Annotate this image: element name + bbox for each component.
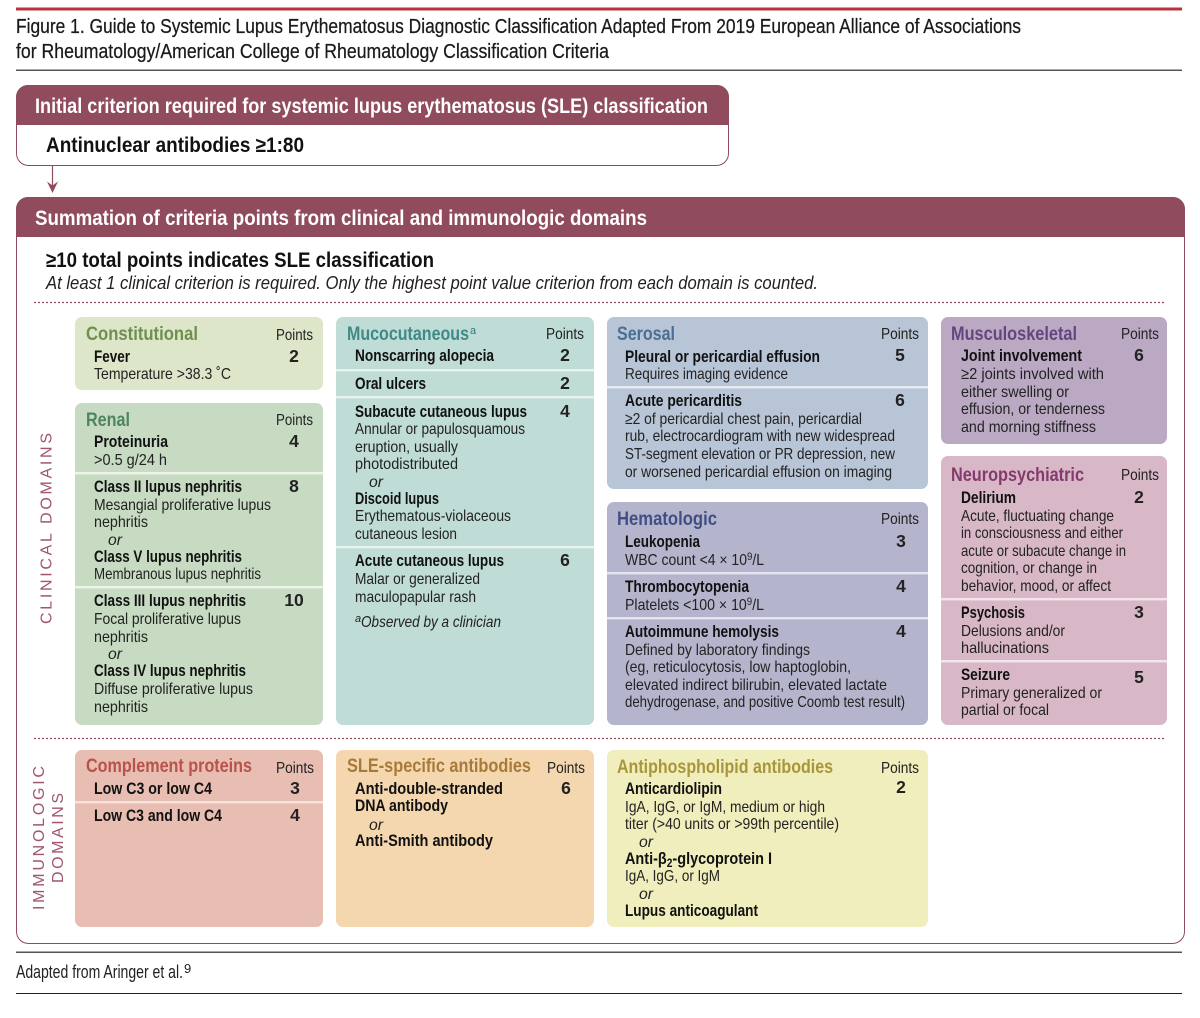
joint involvement criterion: Joint involvement [961, 346, 1082, 365]
class III or IV criterion: Diffuse proliferative lupus [94, 681, 253, 698]
requirement note: At least 1 clinical criterion is required. Only the highest point value criterion from each domain is counted. [45, 273, 818, 293]
class II or V criterion: Class V lupus nephritis [94, 547, 242, 566]
anticardiolipin, anti-beta-2-glycoprotein or lupus anticoagulant criterion: Anticardiolipin [625, 779, 722, 798]
nonscarring alopecia criterion: Nonscarring alopecia [355, 346, 494, 365]
anticardiolipin, anti-beta-2-glycoprotein or lupus anticoagulant criterion: Anti-β [625, 849, 674, 868]
class II or V criterion: or [108, 532, 123, 549]
panel: constitutional [75, 317, 323, 390]
anticardiolipin, anti-beta-2-glycoprotein or lupus anticoagulant criterion: Lupus anticoagulant [625, 901, 758, 920]
low C3 or low C4 criterion [94, 778, 300, 798]
proteinuria criterion: 4 [289, 431, 299, 451]
panel: SLE-specific antibodies: Points [547, 760, 585, 777]
low C3 or low C4 criterion: Low C3 or low C4 [94, 779, 212, 798]
heading: hematologic: Hematologic [617, 508, 717, 530]
leukopenia criterion: Leukopenia [625, 532, 700, 551]
anti-dsDNA or anti-Smith criterion: Anti-double-stranded [355, 779, 503, 798]
heading: complement proteins: Complement proteins [86, 755, 252, 777]
oral ulcers criterion [355, 373, 570, 393]
psychosis criterion: hallucinations [961, 640, 1049, 657]
initial criterion text: Antinuclear antibodies ≥1:80 [46, 134, 304, 157]
fever criterion: 2 [289, 346, 299, 366]
heading: renal: Renal [86, 409, 130, 431]
heading: antiphospholipid antibodies: Antiphospholipid antibodies [617, 756, 833, 778]
thrombocytopenia criterion: Thrombocytopenia [625, 577, 749, 596]
low C3 and low C4 criterion: Low C3 and low C4 [94, 806, 222, 825]
thrombocytopenia criterion [625, 576, 906, 614]
psychosis criterion: 3 [1134, 602, 1144, 622]
joint involvement criterion: either swelling or [961, 384, 1070, 401]
heading: mucocutaneous: Mucocutaneous [347, 323, 469, 345]
thrombocytopenia criterion: 9 [747, 596, 752, 608]
acute pericarditis criterion: ST-segment elevation or PR depression, new [625, 446, 895, 463]
proteinuria criterion [94, 431, 299, 469]
autoimmune hemolysis criterion [625, 621, 906, 711]
thrombocytopenia criterion: Platelets <100 × 10 [625, 597, 763, 614]
panel: mucocutaneous: Points [546, 326, 584, 343]
delirium criterion: acute or subacute change in [961, 543, 1126, 560]
panel: renal [75, 403, 323, 725]
low C3 or low C4 criterion: 3 [290, 778, 300, 798]
subacute cutaneous or discoid lupus criterion: eruption, usually [355, 439, 458, 456]
panel: serosal [607, 317, 928, 489]
panel: hematologic: Points [881, 511, 919, 528]
joint involvement criterion: and morning stiffness [961, 419, 1096, 436]
panel: neuropsychiatric [941, 456, 1167, 725]
anticardiolipin, anti-beta-2-glycoprotein or lupus anticoagulant criterion: IgA, IgG, or IgM, medium or high [625, 799, 825, 816]
delirium criterion: in consciousness and either [961, 525, 1124, 542]
subacute cutaneous or discoid lupus criterion: 4 [560, 401, 570, 421]
anticardiolipin, anti-beta-2-glycoprotein or lupus anticoagulant criterion: -glycoprotein I [672, 849, 772, 868]
panel: mucocutaneous [336, 317, 594, 725]
psychosis criterion: Delusions and/or [961, 623, 1066, 640]
anticardiolipin, anti-beta-2-glycoprotein or lupus anticoagulant criterion: 2 [667, 856, 673, 870]
title: Figure 1. Guide to Systemic Lupus Erythematosus Diagnostic Classification Adapted From 2019 European Alliance of Associations [16, 16, 1021, 38]
joint involvement criterion: effusion, or tenderness [961, 401, 1105, 418]
class III or IV criterion: 10 [284, 590, 304, 610]
acute pericarditis criterion: 6 [895, 390, 905, 410]
panel: serosal: Points [881, 326, 919, 343]
heading: neuropsychiatric: Neuropsychiatric [951, 464, 1084, 486]
panel: antiphospholipid antibodies: Points [881, 760, 919, 777]
anticardiolipin, anti-beta-2-glycoprotein or lupus anticoagulant criterion: IgA, IgG, or IgM [625, 868, 720, 885]
autoimmune hemolysis criterion: dehydrogenase, and positive Coomb test result) [625, 694, 905, 711]
class II or V criterion: Membranous lupus nephritis [94, 566, 261, 583]
subacute cutaneous or discoid lupus criterion: Subacute cutaneous lupus [355, 402, 527, 421]
anti-dsDNA or anti-Smith criterion [355, 778, 571, 850]
proteinuria criterion: Proteinuria [94, 432, 168, 451]
footnote: observed by a clinician: Observed by a clinician [361, 614, 501, 631]
panel: antiphospholipid antibodies [607, 750, 928, 927]
acute pericarditis criterion: ≥2 of pericardial chest pain, pericardial [625, 411, 862, 428]
psychosis criterion: Psychosis [961, 603, 1025, 622]
seizure criterion: Primary generalized or [961, 685, 1103, 702]
acute pericarditis criterion: or worsened pericardial effusion on imaging [625, 464, 892, 481]
leukopenia criterion: WBC count <4 × 10 [625, 552, 765, 569]
pleural or pericardial effusion criterion: 5 [895, 345, 905, 365]
acute pericarditis criterion: Acute pericarditis [625, 391, 742, 410]
immunologic domains label [31, 766, 67, 910]
subacute cutaneous or discoid lupus criterion: Discoid lupus [355, 489, 439, 508]
oral ulcers criterion: 2 [560, 373, 570, 393]
panel: initial criterion [16, 85, 729, 166]
anticardiolipin, anti-beta-2-glycoprotein or lupus anticoagulant criterion: or [639, 886, 654, 903]
initial criterion header bar [16, 85, 729, 125]
class III or IV criterion: Class IV lupus nephritis [94, 661, 246, 680]
class II or V criterion [94, 476, 299, 583]
subacute cutaneous or discoid lupus criterion [355, 401, 570, 543]
title [16, 16, 1021, 63]
panel: musculoskeletal: Points [1121, 326, 1159, 343]
summation header bar [16, 197, 1185, 237]
seizure criterion [961, 665, 1144, 719]
anticardiolipin, anti-beta-2-glycoprotein or lupus anticoagulant criterion: titer (>40 units or >99th percentile) [625, 816, 839, 833]
class III or IV criterion [94, 590, 304, 716]
class III or IV criterion: nephritis [94, 699, 148, 716]
heading: musculoskeletal: Musculoskeletal [951, 323, 1077, 345]
class II or V criterion: Class II lupus nephritis [94, 477, 242, 496]
subacute cutaneous or discoid lupus criterion: Erythematous-violaceous [355, 508, 511, 525]
total points rule: ≥10 total points indicates SLE classification [46, 249, 434, 272]
proteinuria criterion: >0.5 g/24 h [94, 452, 167, 469]
class II or V criterion: 8 [289, 476, 299, 496]
delirium criterion: 2 [1134, 487, 1144, 507]
anti-dsDNA or anti-Smith criterion: DNA antibody [355, 796, 448, 815]
leukopenia criterion: /L [752, 552, 764, 569]
source note: 9 [184, 961, 191, 976]
summation heading: Summation of criteria points from clinical and immunologic domains [35, 207, 647, 230]
delirium criterion: Acute, fluctuating change [961, 508, 1114, 525]
psychosis criterion [961, 602, 1144, 657]
acute cutaneous lupus criterion: 6 [560, 550, 570, 570]
delirium criterion: Delirium [961, 488, 1016, 507]
delirium criterion: behavior, mood, or affect [961, 578, 1111, 595]
nonscarring alopecia criterion: 2 [560, 345, 570, 365]
panel: complement proteins [75, 750, 323, 927]
class III or IV criterion: nephritis [94, 629, 148, 646]
panel: complement proteins: Points [276, 760, 314, 777]
subacute cutaneous or discoid lupus criterion: cutaneous lesion [355, 526, 457, 543]
panel: summation of criteria points [16, 197, 1185, 944]
class II or V criterion: Mesangial proliferative lupus [94, 497, 271, 514]
fever criterion [94, 346, 299, 383]
immunologic domains label: IMMUNOLOGIC [31, 766, 48, 910]
autoimmune hemolysis criterion: elevated indirect bilirubin, elevated lactate [625, 677, 887, 694]
pleural or pericardial effusion criterion [625, 345, 905, 383]
delirium criterion [961, 487, 1144, 595]
acute pericarditis criterion: rub, electrocardiogram with new widespread [625, 428, 895, 445]
joint involvement criterion: ≥2 joints involved with [961, 366, 1104, 383]
seizure criterion: 5 [1134, 667, 1144, 687]
anticardiolipin, anti-beta-2-glycoprotein or lupus anticoagulant criterion: or [639, 834, 654, 851]
panel: SLE-specific antibodies [336, 750, 594, 927]
class III or IV criterion: Focal proliferative lupus [94, 611, 241, 628]
autoimmune hemolysis criterion: Autoimmune hemolysis [625, 622, 779, 641]
leukopenia criterion [625, 531, 906, 569]
acute cutaneous lupus criterion [355, 550, 570, 606]
acute cutaneous lupus criterion: Acute cutaneous lupus [355, 551, 504, 570]
subacute cutaneous or discoid lupus criterion: photodistributed [355, 456, 458, 473]
anti-dsDNA or anti-Smith criterion: Anti-Smith antibody [355, 831, 493, 850]
class III or IV criterion: Class III lupus nephritis [94, 591, 246, 610]
footnote: observed by a clinician: a [355, 613, 361, 625]
title: for Rheumatology/American College of Rheumatology Classification Criteria [16, 41, 610, 63]
thrombocytopenia criterion: 4 [896, 576, 906, 596]
delirium criterion: cognition, or change in [961, 560, 1097, 577]
autoimmune hemolysis criterion: (eg, reticulocytosis, low haptoglobin, [625, 659, 851, 676]
heading: SLE-specific antibodies: SLE-specific antibodies [347, 755, 531, 777]
thrombocytopenia criterion: /L [752, 597, 764, 614]
panel: hematologic [607, 502, 928, 725]
joint involvement criterion [961, 345, 1144, 436]
panel: neuropsychiatric: Points [1121, 467, 1159, 484]
fever criterion: Fever [94, 347, 130, 366]
leukopenia criterion: 9 [747, 551, 752, 563]
pleural or pericardial effusion criterion: Pleural or pericardial effusion [625, 347, 820, 366]
anti-dsDNA or anti-Smith criterion: or [369, 817, 384, 834]
autoimmune hemolysis criterion: Defined by laboratory findings [625, 642, 810, 659]
heading: mucocutaneous: a [470, 325, 477, 337]
anticardiolipin, anti-beta-2-glycoprotein or lupus anticoagulant criterion [625, 777, 906, 920]
pleural or pericardial effusion criterion: Requires imaging evidence [625, 366, 788, 383]
autoimmune hemolysis criterion: 4 [896, 621, 906, 641]
panel: renal: Points [276, 412, 313, 429]
source note: Adapted from Aringer et al. [16, 961, 183, 982]
anti-dsDNA or anti-Smith criterion: 6 [561, 778, 571, 798]
class III or IV criterion: or [108, 646, 123, 663]
panel: constitutional: Points [276, 327, 313, 344]
subacute cutaneous or discoid lupus criterion: or [369, 474, 384, 491]
acute cutaneous lupus criterion: maculopapular rash [355, 589, 476, 606]
fever criterion: Temperature >38.3 ˚C [94, 366, 231, 383]
low C3 and low C4 criterion: 4 [290, 805, 300, 825]
acute pericarditis criterion [625, 390, 905, 481]
panel: musculoskeletal [941, 317, 1167, 444]
subacute cutaneous or discoid lupus criterion: Annular or papulosquamous [355, 421, 525, 438]
acute cutaneous lupus criterion: Malar or generalized [355, 571, 480, 588]
arrow [47, 166, 58, 193]
seizure criterion: partial or focal [961, 702, 1049, 719]
immunologic domains label: DOMAINS [50, 793, 67, 883]
class II or V criterion: nephritis [94, 514, 148, 531]
initial criterion heading: Initial criterion required for systemic lupus erythematosus (SLE) classification [35, 95, 708, 118]
clinical domains label: CLINICAL DOMAINS [38, 433, 56, 624]
joint involvement criterion: 6 [1134, 345, 1144, 365]
seizure criterion: Seizure [961, 665, 1010, 684]
heading: serosal: Serosal [617, 323, 675, 345]
anticardiolipin, anti-beta-2-glycoprotein or lupus anticoagulant criterion: 2 [896, 777, 906, 797]
oral ulcers criterion: Oral ulcers [355, 374, 426, 393]
heading: constitutional: Constitutional [86, 323, 198, 345]
leukopenia criterion: 3 [896, 531, 906, 551]
